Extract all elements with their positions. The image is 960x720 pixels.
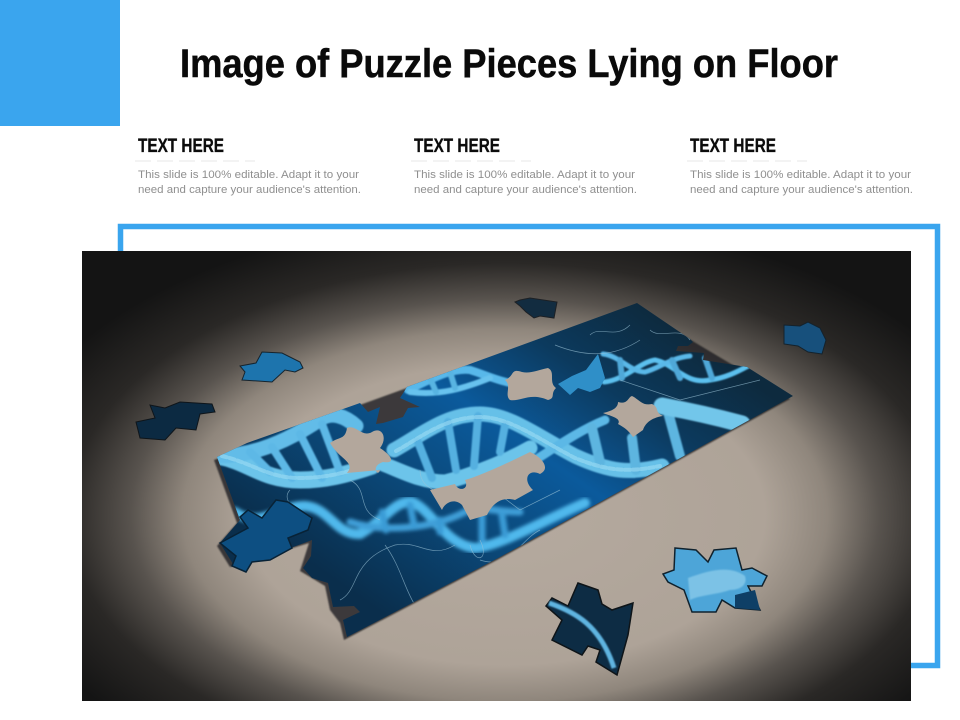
loose piece: bottom left [546, 583, 633, 675]
DNA helix strands [218, 354, 748, 548]
text block 3: This slide is 100% editable. Adapt it to your [690, 169, 911, 181]
text block 2 [411, 136, 637, 196]
puzzle seams [287, 325, 760, 605]
text block 1: need and capture your audience's attention. [138, 184, 361, 196]
text block 3: need and capture your audience's attention. [690, 184, 913, 196]
text block 1 [135, 136, 361, 196]
lifted puzzle piece: center [558, 354, 605, 395]
loose piece: right [784, 322, 826, 354]
text block 2: need and capture your audience's attention. [414, 184, 637, 196]
floor with spotlight [82, 251, 911, 701]
gaps in the puzzle showing floor [330, 368, 663, 520]
text block 2: This slide is 100% editable. Adapt it to your [414, 169, 635, 181]
loose piece: upper left [240, 352, 303, 382]
photo: puzzle on floor [82, 251, 911, 701]
text block 1: This slide is 100% editable. Adapt it to your [138, 169, 359, 181]
corner accent block [0, 0, 120, 126]
puzzle board [214, 303, 793, 640]
text block 1: TEXT HERE [138, 136, 224, 157]
loose piece: top small [515, 298, 557, 318]
lifted puzzle piece: left [220, 500, 312, 572]
title: Image of Puzzle Pieces Lying on Floor [180, 42, 838, 86]
text block 3: TEXT HERE [690, 136, 776, 157]
blue frame [120, 226, 938, 666]
loose piece: bottom right [663, 548, 767, 612]
text block 2: TEXT HERE [414, 136, 500, 157]
loose piece: left [136, 402, 215, 440]
text block 3 [687, 136, 913, 196]
